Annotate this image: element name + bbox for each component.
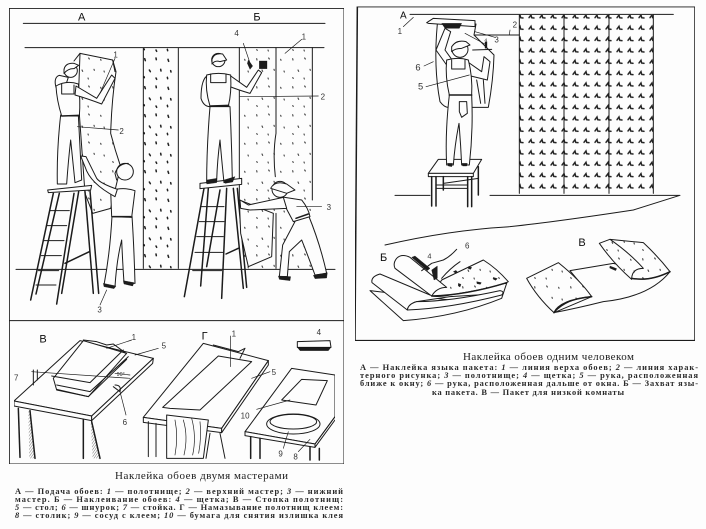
floor and perspective line [385,195,680,245]
detail В table with stack: В [39,334,47,346]
panel frame [355,7,695,341]
sheet held by workers [74,53,121,213]
lower worker А [81,156,135,289]
icon: brush [297,328,331,351]
caption: two workers [15,470,343,520]
detail В table with stack: 6 [123,418,128,427]
callouts for scene А: 4 [484,38,487,44]
upper worker Б [201,53,262,184]
caption body: 8 — столик; 9 — сосуд с клеем; 10 — бумага для снятия излишка клея [15,511,343,520]
ceiling line [410,13,673,16]
panel: wallpapering by one person [355,7,695,341]
callout numbers and leader lines: 2 [119,127,124,136]
detail В table with stack [14,333,167,458]
detail small table with glue vessel: 9 [278,450,283,459]
caption body: ближе к окну; 6 — рука, расположенная дальше от окна. Б — Захват язы- [360,379,698,388]
detail В table with stack: 5 [162,341,167,350]
worker on stool [436,28,490,167]
panel: wallpapering by two workers [9,8,344,464]
callout numbers and leader lines: 1 [302,32,307,41]
detail Б: grabbing packet tongue [370,241,508,321]
panel: table details [14,328,335,461]
pattern line [475,33,519,36]
detail Г table with pasted sheet: Г [202,330,208,342]
detail В table with stack: 90° [117,372,125,378]
callout numbers and leader lines: 2 [321,92,326,101]
wallpaper strip on wall [143,48,178,268]
detail Г table with pasted sheet: 5 [272,368,277,377]
detail Б: grabbing packet tongue: Б [380,252,387,264]
callouts for scene А: 2 [513,20,518,29]
detail В: packet for a low room: В [578,237,586,249]
scene heading А: А [400,10,407,21]
floor line [16,268,335,271]
detail Г table with pasted sheet [143,330,277,458]
detail Б: grabbing packet tongue: 4 [427,252,431,261]
caption body: мастер. Б — Наклеивание обоев: 4 — щетка; В — Стопка полотнищ: [15,495,343,504]
caption title: Наклейка обоев двумя мастерами [115,470,288,482]
upper worker А [55,63,115,184]
scene heading А: А [78,12,86,24]
detail Б: grabbing packet tongue: 6 [465,241,470,250]
callout numbers and leader lines: 3 [97,306,102,315]
callouts for scene А: 6 [415,63,421,73]
callout numbers and leader lines: 4 [234,29,239,38]
detail small table with glue vessel: 8 [293,452,298,461]
lower worker Б [240,181,327,281]
panel frame [9,8,344,464]
scene heading Б: Б [253,12,261,24]
caption body [15,487,343,520]
patterned wallpaper strips [519,15,653,193]
callouts for scene А: 3 [494,36,499,45]
hanging wallpaper sheet [427,18,494,107]
detail Г table with pasted sheet: 1 [232,330,237,339]
callouts for scene А: 5 [418,81,423,91]
icon: brush: 4 [317,328,322,337]
ceiling lines [23,23,325,48]
detail В table with stack: 1 [132,333,137,342]
wallpaper strips in scene Б [239,48,313,268]
detail В: packet for a low room [527,237,670,313]
detail small table with glue vessel [241,368,335,461]
detail small table with glue vessel: 10 [241,411,250,420]
caption body: 5 — стол; 6 — шнурок; 7 — стойка. Г — Намазывание полотнищ клеем: [15,503,343,512]
lower sheet Б [239,200,273,267]
ladder А [31,185,99,304]
caption body: А — Наклейка языка пакета: 1 — линия верха обоев; 2 — линия харак- [360,363,698,372]
brush on pole [243,43,267,69]
caption body: ка пакета. В — Пакет для низкой комнаты [432,388,624,397]
caption body [360,363,698,397]
caption body: А — Подача обоев: 1 — полотнище; 2 — верхний мастер; 3 — нижний [15,487,343,496]
callout numbers and leader lines [77,29,332,315]
callout numbers and leader lines: 1 [113,50,118,59]
caption body: терного рисунка; 3 — полотнище; 4 — щетка; 5 — рука, расположенная [360,371,698,380]
callouts for scene А: 1 [398,27,403,36]
callout numbers and leader lines: 3 [327,203,332,212]
caption title: Наклейка обоев одним человеком [463,351,634,363]
ladder Б [184,178,247,298]
callouts for scene А [398,17,518,91]
stool [428,159,482,207]
caption: one person [360,351,698,397]
detail В table with stack: 7 [14,374,19,383]
